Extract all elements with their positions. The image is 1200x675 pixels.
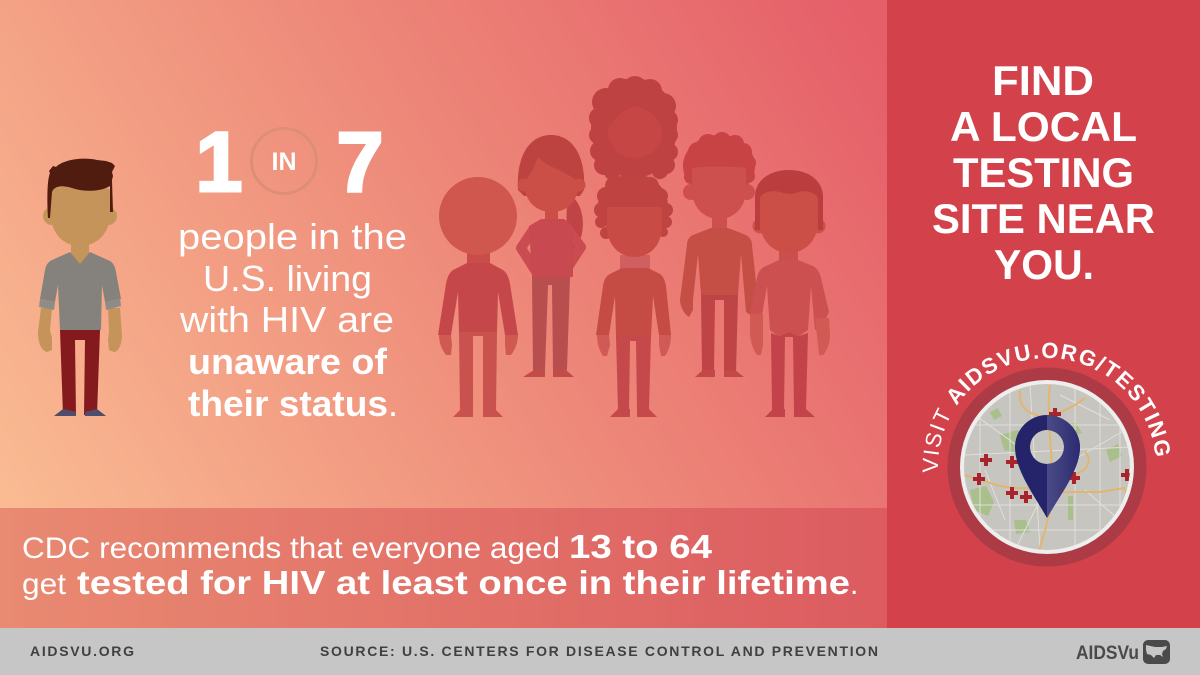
icon: location pin [1015, 415, 1080, 518]
text block: unaware statement: U.S. living [203, 258, 372, 299]
panel: call to action [887, 0, 1200, 628]
text: CDC recommendation line one [22, 528, 713, 565]
text: CDC recommendation line one: CDC recommends that everyone aged [22, 532, 560, 565]
heading: find a local testing site: SITE NEAR [932, 195, 1155, 242]
number 1: 1 [196, 115, 242, 209]
text block: unaware statement: . [388, 383, 398, 424]
panel: recommendation band [0, 508, 887, 628]
badge: in: IN [272, 148, 296, 176]
text block: unaware statement: their status [188, 383, 388, 424]
footer bar [0, 628, 1200, 675]
logo: AIDSVu [1076, 640, 1170, 664]
footer: source: SOURCE: U.S. CENTERS FOR DISEASE CONTROL AND PREVENTION [320, 643, 878, 659]
text block: unaware statement: people in the [178, 216, 407, 257]
illustration: group of six silhouettes [438, 76, 830, 417]
map badge [948, 368, 1146, 566]
heading: 1 in 7 [196, 115, 383, 209]
text: curved URL: VISIT AIDSVU.ORG/TESTING [922, 342, 1170, 472]
text: CDC recommendation line two: . [850, 568, 858, 601]
heading: find a local testing site: TESTING [953, 149, 1134, 196]
panel: gradient background [0, 0, 887, 628]
number 7: 7 [337, 115, 383, 209]
icon: US map badge [1143, 640, 1170, 664]
silhouette: man with short curly hair [680, 132, 759, 377]
logo: AIDSVu: AIDSVu [1076, 643, 1139, 664]
heading: find a local testing site: FIND [992, 57, 1094, 104]
text block: unaware statement: with HIV are [179, 299, 394, 340]
text: CDC recommendation line two: tested for HIV at least once in their lifetime [77, 564, 850, 601]
badge: in [252, 128, 316, 194]
text block: unaware statement: unaware of [188, 341, 388, 382]
heading: find a local testing site: A LOCAL [950, 103, 1137, 150]
text block: unaware statement [178, 216, 407, 424]
text: CDC recommendation line one: 13 to 64 [569, 528, 713, 565]
text: CDC recommendation line two: get [22, 568, 67, 601]
silhouette: woman with curly hair, back [589, 76, 678, 180]
map [964, 384, 1130, 550]
heading: find a local testing site: YOU. [994, 241, 1094, 288]
heading: find a local testing site [932, 57, 1155, 288]
silhouette: woman with ponytail [518, 135, 586, 377]
footer: site: AIDSVU.ORG [30, 643, 134, 659]
figure: man in grey shirt [38, 159, 122, 416]
silhouette: man, right [750, 170, 830, 417]
silhouette: front person with curly hair [594, 174, 673, 417]
silhouette: man, left [438, 177, 518, 417]
